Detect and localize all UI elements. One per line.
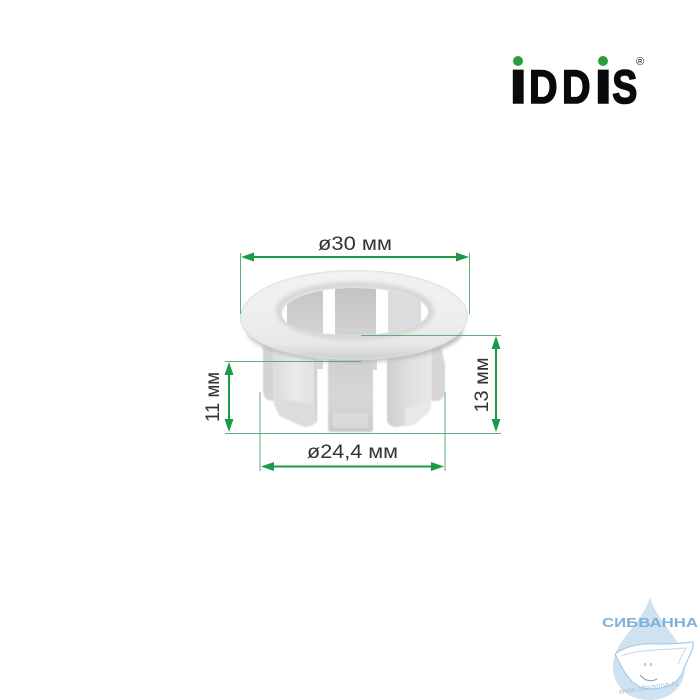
extension lines [260,392,445,471]
arrow [265,466,440,468]
arrowheads [241,252,469,262]
inner leg left [287,290,323,334]
logo: IDDIS [510,56,644,114]
inner leg centre [335,286,376,338]
leg left tip [274,398,317,427]
extension line [225,360,361,362]
hole background [282,296,428,335]
hole interior [282,288,428,335]
dimension: height 11 mm [203,362,361,432]
logo dot right [598,56,608,66]
side leg left [263,345,274,401]
logo wordmark [510,61,637,114]
flange ring [240,270,468,360]
tab left [317,360,323,369]
dimension: height 13 mm [225,336,501,434]
leg right tip [405,402,430,426]
logo wordmark: I [595,61,612,113]
extension lines [225,336,501,434]
dimension: diameter 30 mm [240,234,470,314]
label: ø24,4 мм [307,442,398,463]
bathtub inner [621,648,686,664]
tab right [372,360,377,370]
arrow [495,340,497,428]
website: www.sibvanna.ru [617,679,679,696]
logo wordmark: I [510,61,527,113]
ring inner shading [240,270,468,360]
hole rim shadow [279,285,431,337]
leg centre tip [333,413,368,428]
label: ø30 мм [318,234,392,255]
leg left [273,350,317,427]
registered mark: ® [636,56,644,68]
bathtub face [640,663,657,681]
outer rim edge [240,270,468,360]
bathtub [615,642,693,689]
arrow [245,256,465,258]
dimension: diameter 24,4 mm [260,392,445,471]
watermark: Sibvanna logo [602,597,699,700]
arrow [228,366,230,428]
arrowheads [224,362,234,432]
leg right [387,350,431,427]
side leg right [431,345,445,401]
logo wordmark: D [529,62,558,114]
logo wordmark: D [562,62,591,114]
label: 13 мм [472,358,493,412]
leg centre [328,355,373,432]
arrowheads [492,336,500,432]
logo wordmark: S [612,61,637,114]
ring shadow [247,298,463,362]
logo dot left [513,56,523,66]
label: 11 мм [203,372,224,422]
arrowheads [261,462,444,471]
product: overflow ring with legs [240,270,468,432]
extension lines [240,253,470,314]
water drop [613,597,685,700]
inner leg right [388,290,421,332]
brand name: СИБВАННА [602,615,699,630]
